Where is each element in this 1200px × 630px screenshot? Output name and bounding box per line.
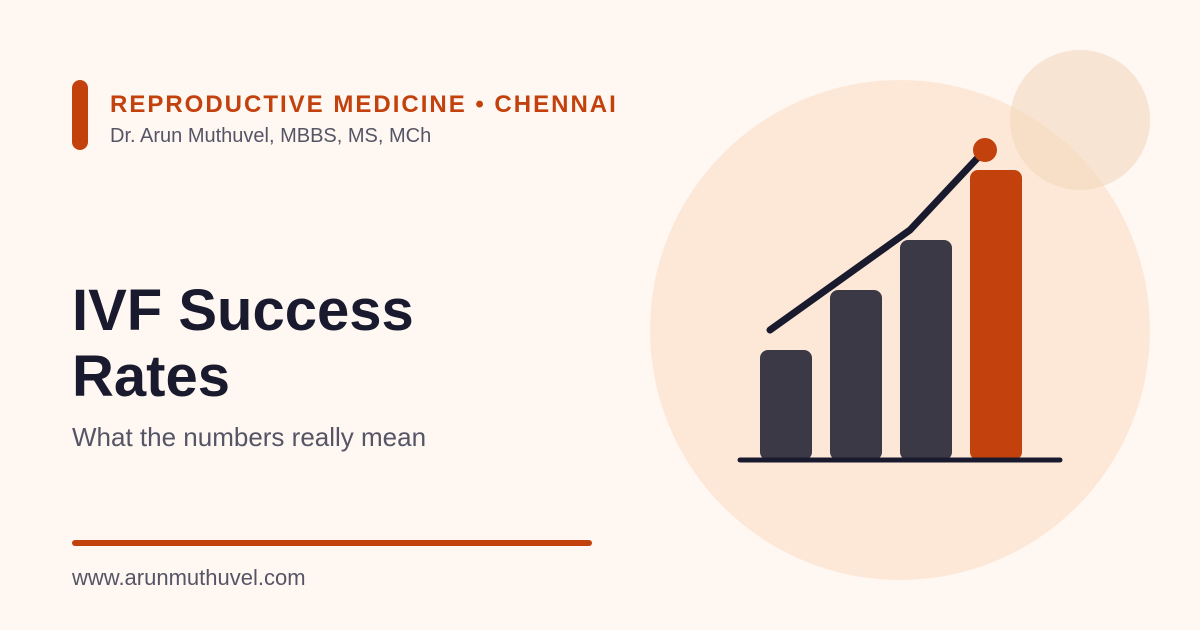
bar 2 xyxy=(830,290,882,460)
website url: www.arunmuthuvel.com xyxy=(72,565,306,590)
eyebrow label: REPRODUCTIVE MEDICINE • CHENNAI xyxy=(110,91,618,118)
divider bar xyxy=(72,540,592,546)
title: IVF Success xyxy=(72,278,414,343)
large background circle xyxy=(650,80,1150,580)
small accent circle xyxy=(1010,50,1150,190)
bar 3 xyxy=(900,240,952,460)
bar 1 xyxy=(760,350,812,460)
chart baseline xyxy=(740,458,1060,462)
bar chart icon xyxy=(740,138,1060,460)
bar 4 highlighted xyxy=(970,170,1022,460)
trend line xyxy=(770,150,985,330)
title: Rates xyxy=(72,344,230,409)
subtitle: What the numbers really mean xyxy=(72,422,426,452)
author credit: Dr. Arun Muthuvel, MBBS, MS, MCh xyxy=(110,125,431,147)
trend end dot xyxy=(973,138,997,162)
title xyxy=(72,278,414,409)
accent pill xyxy=(72,80,88,150)
